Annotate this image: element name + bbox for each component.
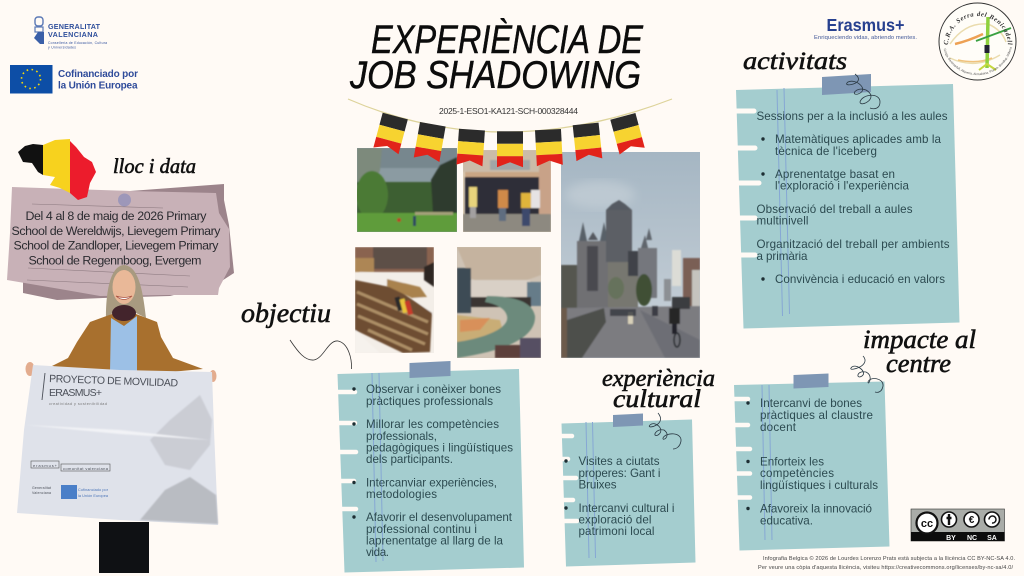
banner text: creatividad y sostenibilidad — [49, 402, 107, 406]
left low building — [561, 265, 579, 310]
logo: CRA Serra del Benicadell: Gorga, Benimarfull, Alqueria, Almudaina, Planes, Benillup, Millena — [944, 47, 1012, 76]
heading: objectiu: objectiu — [241, 298, 331, 328]
banner text: ERASMUS+ — [49, 387, 102, 399]
holes — [560, 436, 577, 521]
impact list: lingüístiques i culturals — [760, 479, 878, 492]
right houses — [683, 258, 700, 308]
heading: experiència cultural: experiència — [602, 366, 715, 392]
place and date text — [12, 209, 221, 268]
pedestrians — [628, 312, 633, 324]
place and date text: School de Wereldwijs, Lievegem Primary — [12, 224, 221, 238]
margin lines — [777, 88, 790, 316]
impact list: pràctiques al claustre — [760, 409, 873, 422]
activity list: Organització del treball per ambients — [756, 238, 950, 251]
tape — [613, 414, 643, 427]
logo: Generalitat Valenciana: Conselleria de Educación, Cultura — [48, 41, 107, 45]
jacket — [52, 314, 203, 372]
objective list: metodologies — [366, 488, 437, 501]
heading: experiència cultural — [602, 366, 715, 413]
objective list: professional continu i — [366, 523, 477, 536]
banner text: PROYECTO DE MOVILIDAD — [49, 373, 179, 390]
banner — [17, 365, 218, 525]
hair — [106, 265, 146, 318]
activity list: Matemàtiques aplicades amb la — [775, 133, 942, 146]
spiral — [847, 74, 880, 109]
objective list: pràctiques professionals — [366, 395, 493, 408]
activity list: Observació del treball a aules — [756, 203, 913, 216]
spiral — [649, 413, 681, 449]
panel: lloc i data — [7, 184, 234, 300]
heading: impacte al centre — [863, 325, 976, 378]
cultural list: exploració del — [578, 514, 652, 526]
nave — [577, 241, 608, 309]
logo: Generalitat Valenciana: VALENCIANA — [48, 30, 98, 39]
legs — [99, 522, 149, 573]
objective list: dels participants. — [366, 453, 453, 466]
impact list: Enforteix les — [760, 456, 824, 468]
objective list: Millorar les competències — [366, 418, 499, 431]
icon: CC BY-NC-SA badge: BY — [946, 535, 956, 542]
place and date text: School de Zandloper, Lievegem Primary — [14, 238, 219, 252]
photo: Ghent — [561, 152, 700, 358]
logo: CRA Serra del Benicadell — [938, 2, 1016, 80]
banner text: erasmus+ — [33, 463, 58, 468]
heading: lloc i data: lloc i data — [113, 154, 196, 178]
objective list: Afavorir el desenvolupament — [366, 511, 513, 524]
objective list: professionals, — [366, 430, 437, 443]
railing — [561, 308, 606, 358]
activity list: l'exploració i l'experiència — [775, 180, 910, 192]
banner text: Cofinanciado por — [78, 488, 109, 492]
holes — [733, 111, 759, 255]
banner text — [31, 373, 179, 499]
title — [349, 17, 644, 97]
cultural list: Visites a ciutats — [578, 455, 660, 468]
cultural list: properes: Gant i — [578, 467, 660, 480]
activity list: Convivència i educació en valors — [775, 273, 945, 286]
margin lines — [762, 385, 772, 540]
impact list: competències — [760, 467, 834, 480]
heading: impacte al centre: impacte al — [863, 325, 976, 354]
cultural list — [564, 455, 674, 538]
banner map shading — [26, 395, 218, 524]
logo: Erasmus+: Erasmus+ — [826, 15, 904, 35]
impact list — [746, 397, 878, 528]
place and date text: Del 4 al 8 de maig de 2026 Primary — [26, 209, 207, 223]
right group — [638, 248, 657, 298]
icon: CC BY-NC-SA badge: cc — [921, 518, 933, 530]
objective list — [352, 383, 513, 559]
scarf — [112, 305, 136, 321]
logo: CRA Serra del Benicadell: C.R.A. Serra del Benicadell — [944, 12, 1013, 45]
banner text: Valenciana — [32, 491, 51, 495]
holes — [733, 399, 750, 498]
objective list: Observar i conèixer bones — [366, 383, 501, 396]
logo: EU co-funded — [10, 65, 138, 94]
activity list — [756, 110, 950, 286]
paper shadow — [23, 184, 234, 300]
logo: Generalitat Valenciana — [34, 17, 107, 50]
objective list: pedagògiques i lingüístiques — [366, 442, 513, 454]
objective list: Intercanviar experiències, — [366, 476, 497, 490]
license note: Infografia Belgica © 2026 de Lourdes Lorenzo Prats està subjecta a la llicència CC BY-NC-SA 4.0. — [763, 555, 1015, 562]
string — [348, 99, 672, 132]
hands — [26, 362, 34, 376]
impact list: docent — [760, 421, 797, 434]
panel: activitats — [733, 74, 960, 328]
margin lines — [372, 373, 383, 562]
icon: CC BY-NC-SA badge: NC — [967, 535, 977, 542]
icon: CC BY-NC-SA badge: € — [969, 515, 975, 526]
spiral — [851, 356, 883, 392]
icon: CC BY-NC-SA badge: SA — [987, 535, 997, 542]
activity list: tècnica de l'iceberg — [775, 145, 877, 158]
tram stop — [672, 297, 690, 309]
photo: pastries — [355, 247, 434, 353]
activity list: Sessions per a la inclusió a les aules — [756, 110, 948, 123]
photo: classroom corridor — [463, 150, 551, 232]
cyclist — [669, 308, 680, 324]
impact list: Afavoreix la innovació — [760, 502, 872, 516]
activity list: multinivell — [756, 214, 808, 228]
heading: impacte al centre: centre — [886, 349, 951, 378]
face — [112, 270, 136, 304]
tape — [794, 374, 828, 388]
cultural list: patrimoni local — [578, 525, 654, 538]
logo: Erasmus+ — [814, 15, 917, 41]
banner text: Generalitat — [32, 486, 51, 490]
icon: CC BY-NC-SA badge — [911, 509, 1004, 542]
impact list: Intercanvi de bones — [760, 397, 862, 410]
objective list: vida. — [366, 546, 389, 559]
photo: park — [356, 148, 457, 232]
panel: objectiu — [335, 361, 524, 572]
objective list: laprenentatge al llarg de la — [366, 534, 504, 548]
bunting — [348, 99, 672, 167]
margin lines — [586, 422, 596, 558]
heading: activitats: activitats — [743, 48, 847, 75]
person holding Erasmus+ banner — [17, 265, 218, 573]
panel: impacte al centre — [733, 356, 890, 550]
icon: Belgium map — [18, 139, 96, 200]
tape — [410, 361, 450, 378]
pin — [118, 194, 131, 206]
activity list: a primària — [756, 250, 808, 263]
cultural list: Intercanvi cultural i — [578, 502, 674, 515]
logo: Generalitat Valenciana: y Universidades — [48, 46, 76, 50]
main tower — [606, 210, 632, 262]
title: EXPERIÈNCIA DE — [371, 17, 644, 62]
place and date text: School de Regennboog, Evergem — [28, 254, 202, 268]
shirt — [110, 316, 137, 372]
street — [561, 306, 700, 358]
note paper — [734, 382, 890, 550]
belfry — [672, 250, 681, 286]
heading: experiència cultural: cultural — [613, 386, 701, 413]
paper lines — [27, 204, 190, 287]
panel: experiència cultural — [560, 413, 696, 566]
logo: Generalitat Valenciana: GENERALITAT — [48, 22, 101, 31]
note paper — [736, 84, 960, 328]
note paper — [338, 369, 524, 572]
license note: Per veure una còpia d'aquesta llicència, visiteu https://creativecommons.org/licenses/by-nc-sa/4.0/ — [758, 565, 1013, 571]
banner text: comunitat valenciana — [63, 466, 109, 471]
logo: EU co-funded: la Unión Europea — [58, 80, 138, 92]
activity list: Aprenentatge basat en — [775, 168, 895, 181]
note paper — [562, 420, 696, 566]
logo: EU co-funded: Cofinanciado por — [58, 69, 138, 80]
banner text: la Unión Europea — [78, 494, 109, 498]
license note — [758, 555, 1015, 571]
impact list: educativa. — [760, 514, 813, 528]
flags — [373, 113, 408, 154]
title: JOB SHADOWING — [349, 54, 641, 97]
holes — [335, 392, 356, 509]
cultural list: Bruixes — [578, 478, 617, 492]
tape — [822, 74, 871, 95]
paper — [7, 187, 230, 296]
arrow: objectiu to note — [290, 340, 352, 369]
logo: Erasmus+: Enriqueciendo vidas, abriendo mentes. — [814, 35, 917, 41]
photo: classroom table — [457, 247, 541, 358]
project code: 2025-1-ESO1-KA121-SCH-000328444 — [439, 106, 578, 116]
